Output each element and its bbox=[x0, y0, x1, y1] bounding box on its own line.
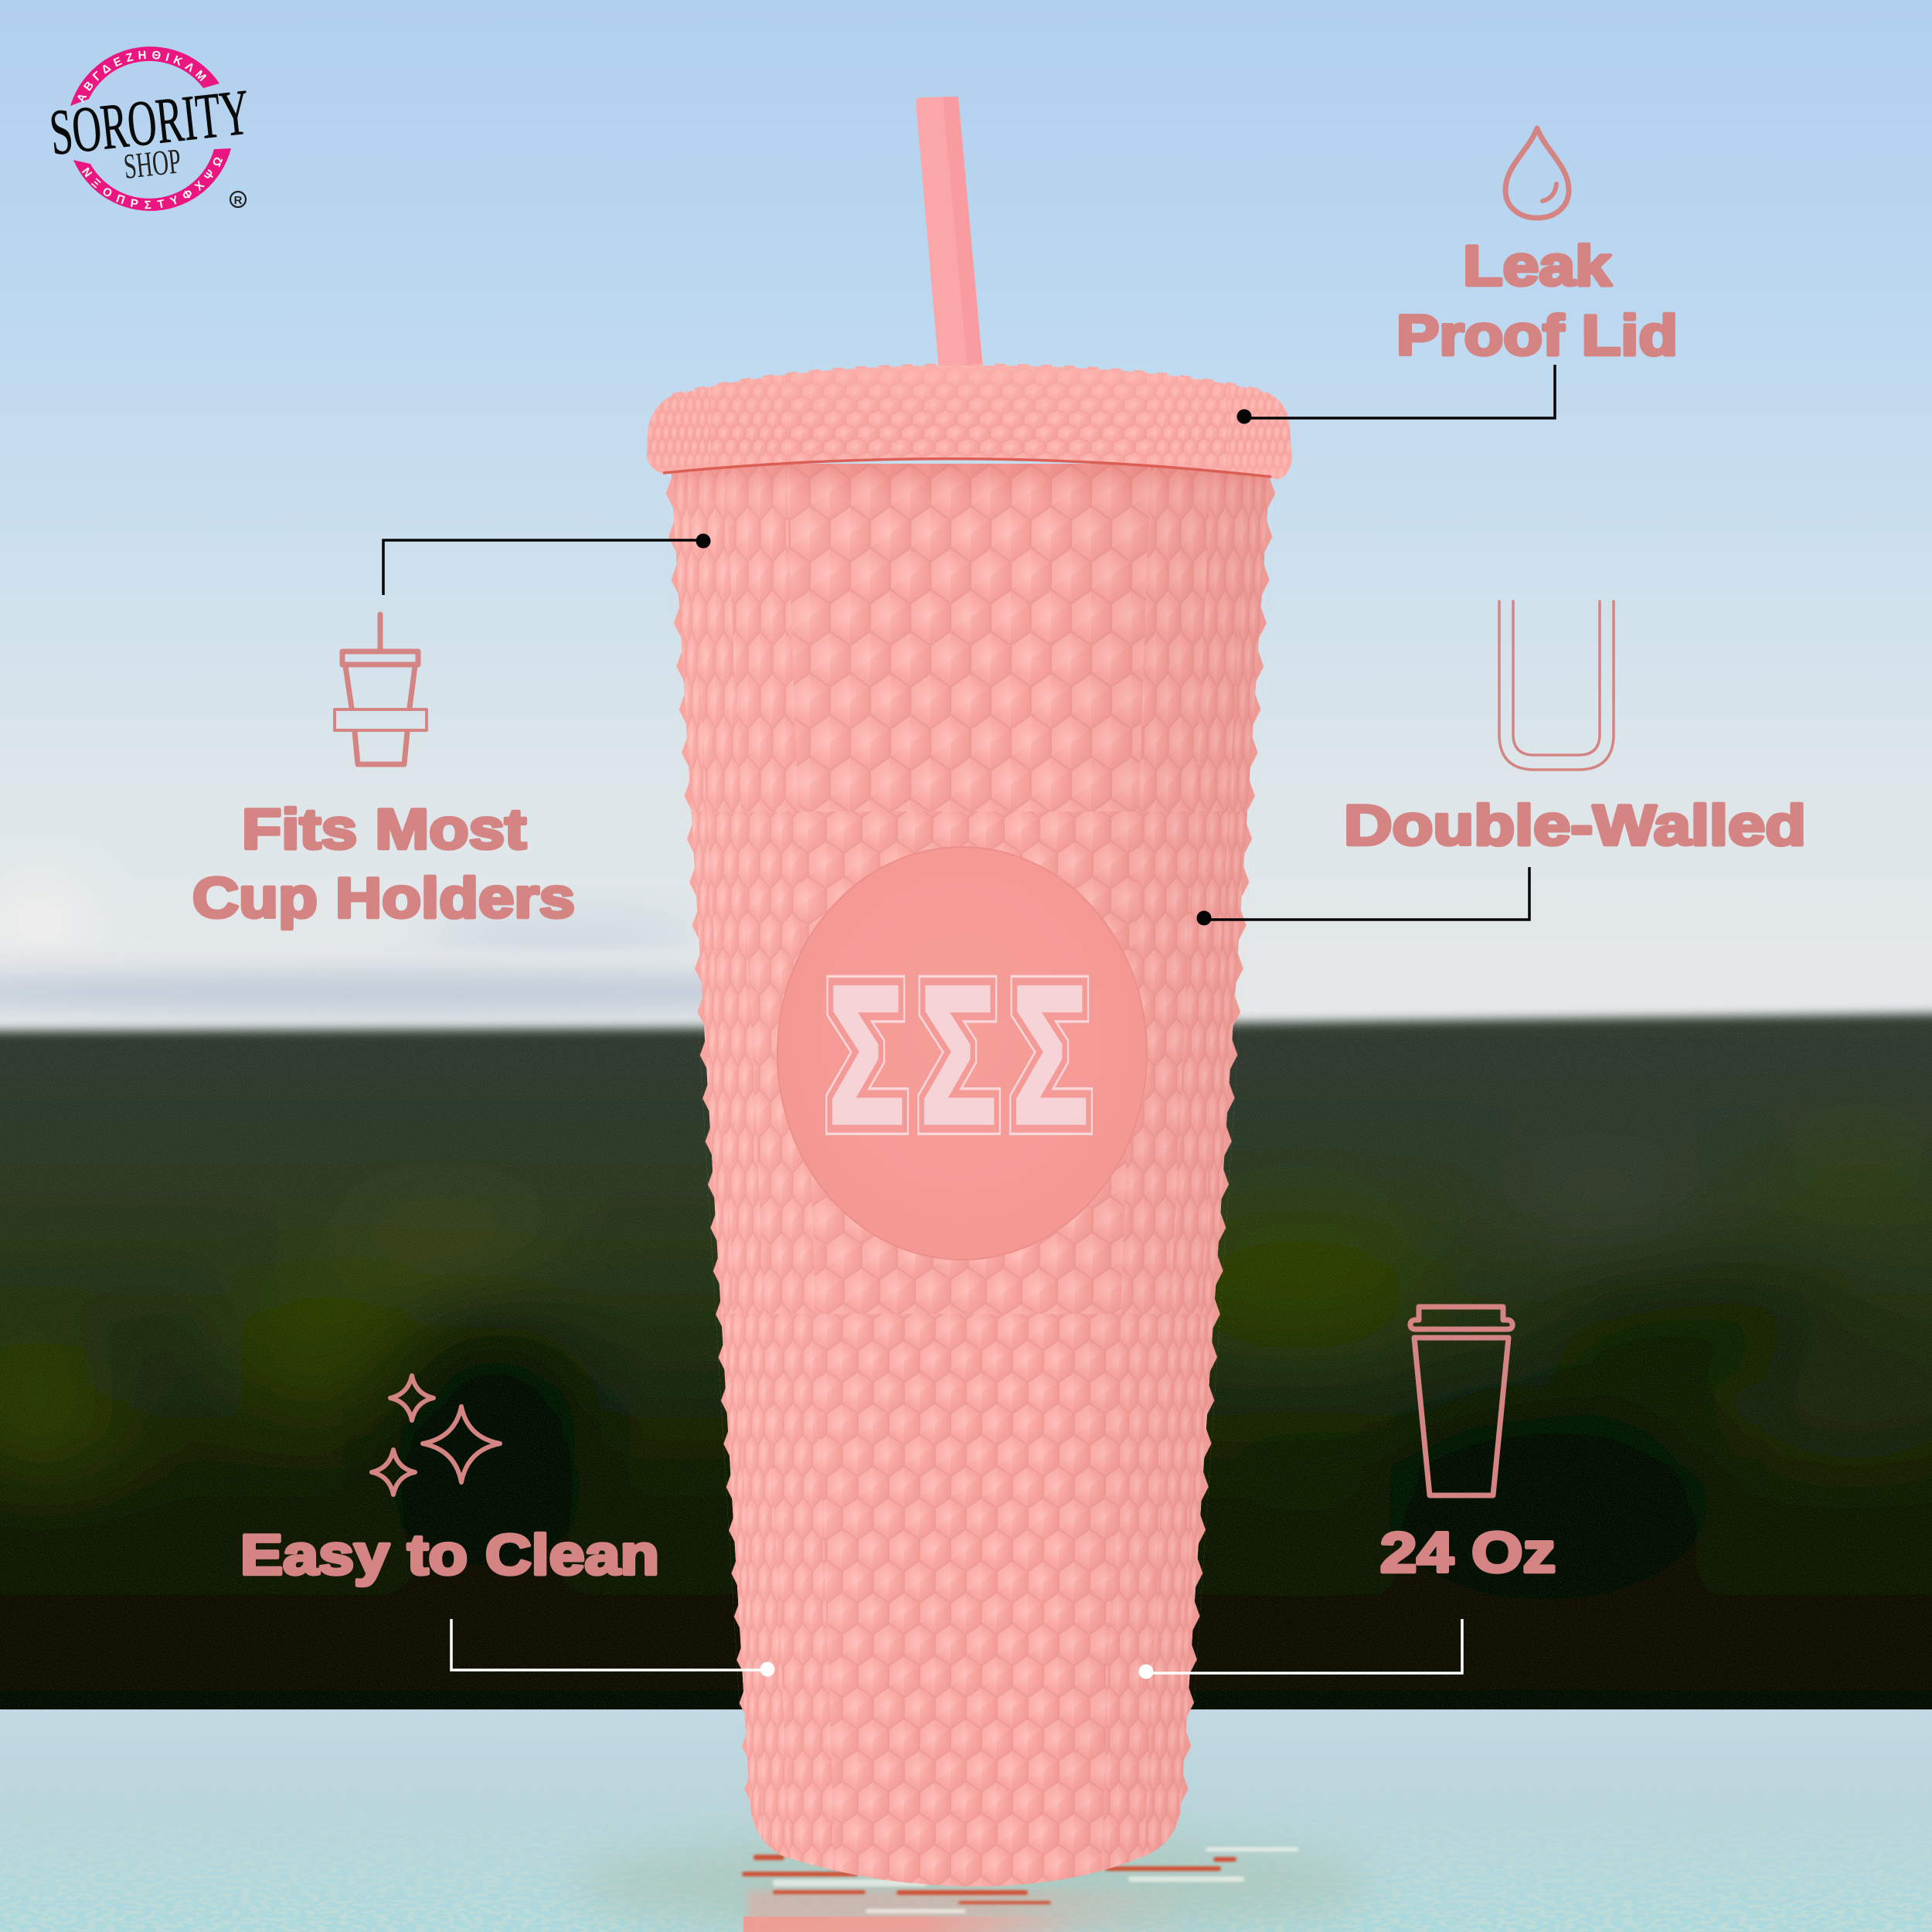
sigma letter 3: Σ bbox=[1012, 947, 1088, 1164]
logo greek alphabet top: ΑΒΓΔΕΖΗΘΙΚΛΜ bbox=[77, 51, 207, 104]
heading: Leak: Leak bbox=[1463, 235, 1611, 298]
sigma letter 2: Σ bbox=[920, 947, 996, 1164]
heading: Cup Holders: Cup Holders bbox=[192, 867, 575, 930]
leader line: 24 oz bbox=[1139, 1619, 1462, 1679]
heading: 24 Oz: 24 Oz bbox=[1380, 1522, 1556, 1584]
sigma letter 3: Σ bbox=[1012, 947, 1088, 1164]
leader line: easy to clean bbox=[451, 1619, 774, 1677]
icon: sparkles bbox=[372, 1376, 500, 1495]
straw bbox=[916, 97, 983, 371]
logo: Sorority Shop bbox=[46, 46, 253, 211]
table reflection bbox=[742, 1847, 1298, 1932]
callout: leak proof lid bbox=[1236, 128, 1678, 423]
logo wordmark: SORORITY bbox=[46, 76, 253, 169]
sigma letter 3: Σ bbox=[1012, 947, 1088, 1164]
logo ring top arc bbox=[70, 46, 219, 106]
sigma letter 3 bbox=[1012, 947, 1088, 1164]
leader line: double wall bbox=[1196, 867, 1529, 926]
logo ring bottom arc bbox=[73, 148, 231, 211]
icon: to-go cup bbox=[1410, 1307, 1512, 1495]
sigma letter 1: Σ bbox=[828, 947, 904, 1164]
callout: double-walled bbox=[1196, 601, 1806, 926]
icon: water drop bbox=[1505, 128, 1569, 218]
leader line: cup holder bbox=[383, 533, 711, 595]
icon: double wall cup section bbox=[1499, 601, 1614, 770]
heading: Proof Lid: Proof Lid bbox=[1396, 304, 1678, 367]
lid bbox=[641, 359, 1298, 483]
sigma letter 1: Σ bbox=[828, 947, 904, 1164]
heading: Double-Walled: Double-Walled bbox=[1344, 794, 1806, 857]
tumbler bbox=[641, 97, 1298, 1901]
badge: smooth circular patch bbox=[777, 847, 1147, 1260]
callout: fits most cup holders bbox=[192, 533, 711, 930]
heading: Fits Most: Fits Most bbox=[242, 798, 526, 861]
heading: Easy to Clean: Easy to Clean bbox=[240, 1524, 659, 1587]
logo subword: SHOP bbox=[122, 141, 183, 186]
sigma letter 1 bbox=[828, 947, 904, 1164]
leader line: lid bbox=[1236, 365, 1555, 423]
sigma letter 2: Σ bbox=[920, 947, 996, 1164]
sigma letter 1: Σ bbox=[828, 947, 904, 1164]
tumbler studded body bbox=[657, 456, 1291, 1901]
callout: easy to clean bbox=[240, 1376, 774, 1677]
callout: 24 oz bbox=[1139, 1307, 1556, 1679]
registered mark: R bbox=[234, 194, 243, 207]
registered mark bbox=[230, 192, 246, 207]
tumbler edge serrations bbox=[665, 471, 1277, 1811]
icon: cup in holder bbox=[335, 614, 427, 764]
sigma letter 2: Σ bbox=[920, 947, 996, 1164]
sigma letter 2 bbox=[920, 947, 996, 1164]
logo greek alphabet bottom: ΝΞΟΠΡΣΤΥΦΧΨΩ bbox=[82, 158, 223, 209]
